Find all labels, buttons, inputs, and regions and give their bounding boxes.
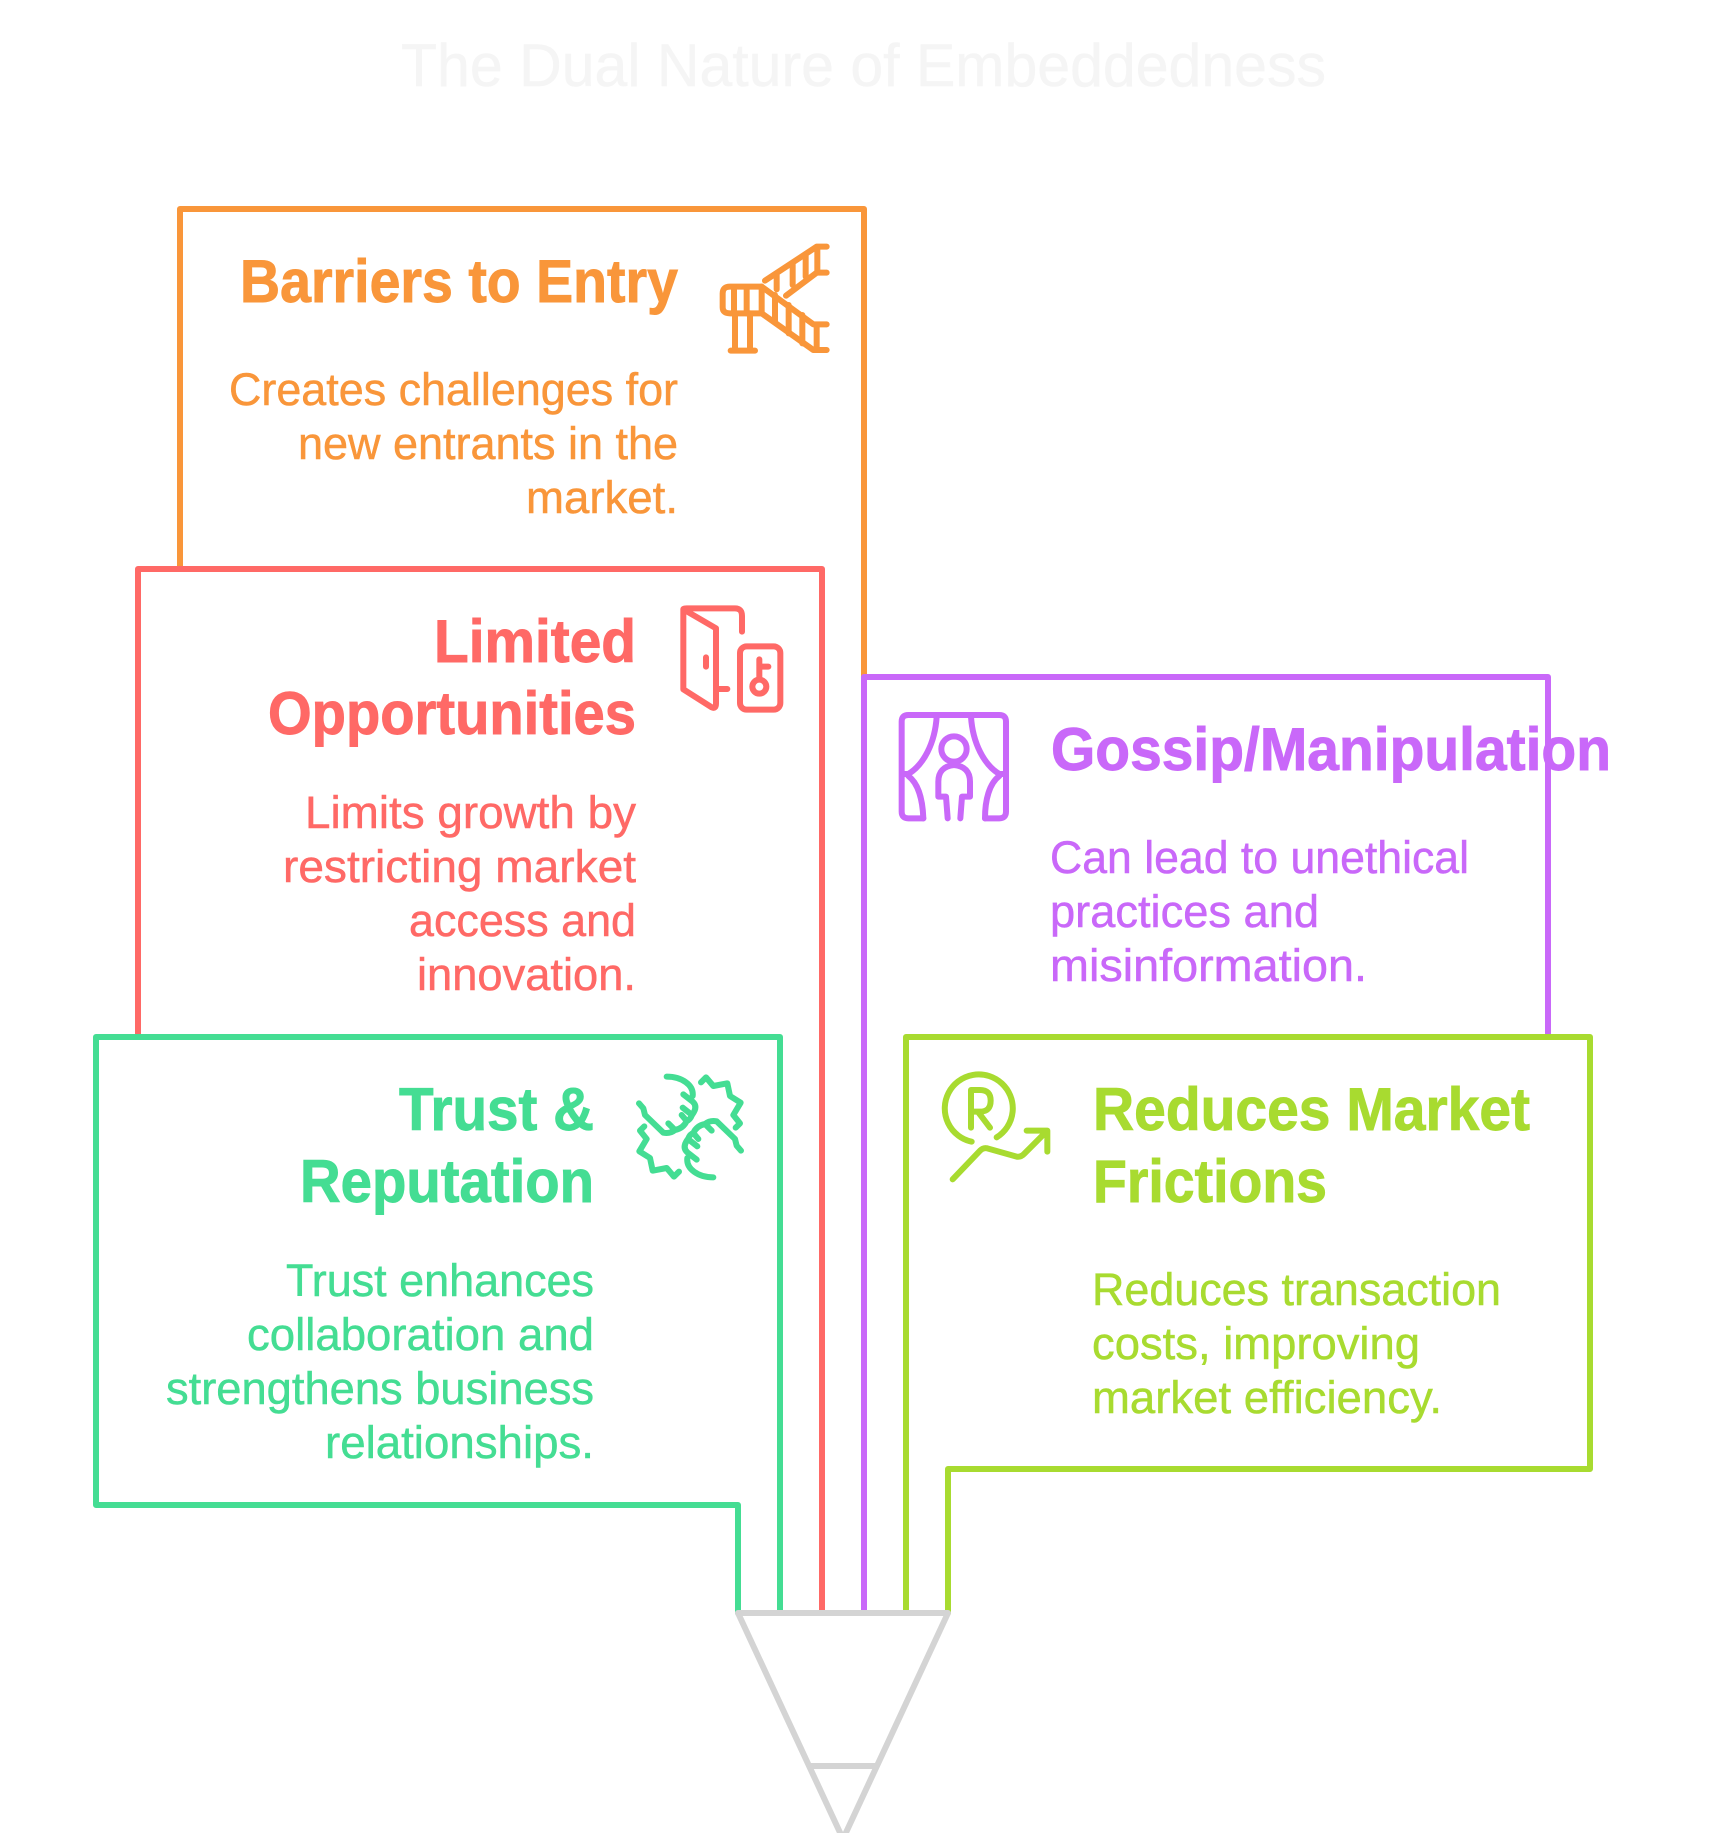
heading: limited opportunities: Opportunities (268, 680, 636, 747)
funnel: grey pencil tip (738, 1613, 948, 1833)
description: gossip/manipulation: Can lead to unethical (1050, 832, 1469, 883)
description: barriers to entry (229, 364, 678, 523)
description: limited opportunities: innovation. (417, 949, 636, 1000)
description: limited opportunities (283, 787, 637, 1000)
heading: barriers to entry: Barriers to Entry (240, 248, 679, 315)
panel outline: limited opportunities (138, 569, 822, 1613)
description: limited opportunities: restricting market (283, 841, 636, 892)
description: reduces market frictions: market efficiency. (1092, 1372, 1442, 1423)
panel outline: gossip/manipulation (864, 677, 1548, 1613)
description: trust and reputation (166, 1255, 594, 1468)
icon: person between curtains (902, 715, 1006, 818)
panel: barriers to entry (180, 209, 864, 677)
panel: limited opportunities (138, 569, 822, 1613)
panel outline: trust and reputation (96, 1037, 780, 1613)
description: gossip/manipulation: misinformation. (1050, 940, 1367, 991)
heading: reduces market frictions: Frictions (1093, 1148, 1327, 1215)
description: limited opportunities: Limits growth by (305, 787, 637, 838)
panel outline: barriers to entry (180, 209, 864, 677)
heading: limited opportunities: Limited (434, 608, 636, 675)
description: trust and reputation: collaboration and (247, 1309, 594, 1360)
panel: gossip/manipulation (864, 677, 1611, 1613)
heading: limited opportunities (268, 608, 636, 747)
heading: gossip/manipulation: Gossip/Manipulation (1051, 716, 1611, 783)
icon: stairs (723, 247, 827, 351)
panel outline: reduces market frictions (906, 1037, 1590, 1613)
description: reduces market frictions (1092, 1264, 1501, 1423)
description: barriers to entry: market. (526, 472, 678, 523)
description: limited opportunities: access and (409, 895, 636, 946)
description: gossip/manipulation: practices and (1050, 886, 1319, 937)
icon: door and key (683, 608, 780, 710)
description: barriers to entry: Creates challenges for (229, 364, 678, 415)
heading: trust and reputation: Reputation (300, 1148, 594, 1215)
heading: trust and reputation (300, 1076, 594, 1215)
heading: reduces market frictions: Reduces Market (1093, 1076, 1530, 1143)
panel: reduces market frictions (906, 1037, 1590, 1613)
icon: handshake (639, 1077, 741, 1177)
icon: registered mark with rising arrow (945, 1074, 1047, 1179)
description: reduces market frictions: Reduces transaction (1092, 1264, 1501, 1315)
description: trust and reputation: relationships. (325, 1417, 594, 1468)
description: trust and reputation: strengthens business (166, 1363, 594, 1414)
heading: trust and reputation: Trust & (399, 1076, 594, 1143)
description: reduces market frictions: costs, improving (1092, 1318, 1420, 1369)
panel: trust and reputation (96, 1037, 780, 1613)
description: gossip/manipulation (1050, 832, 1469, 991)
heading: reduces market frictions (1093, 1076, 1530, 1215)
description: barriers to entry: new entrants in the (298, 418, 678, 469)
description: trust and reputation: Trust enhances (286, 1255, 594, 1306)
title: The Dual Nature of Embeddedness (401, 32, 1326, 99)
